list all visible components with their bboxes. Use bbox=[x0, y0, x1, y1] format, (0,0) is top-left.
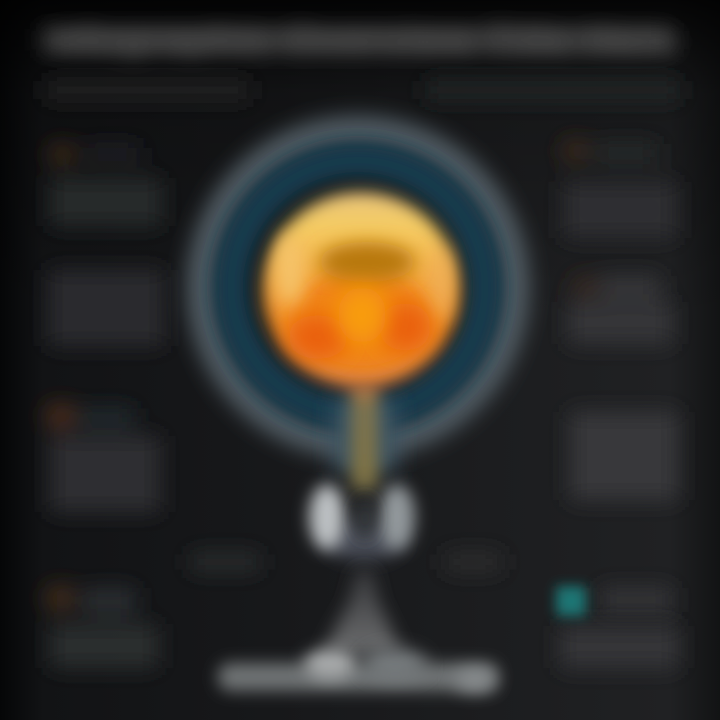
title text: Infographic Overview Title Here bbox=[42, 22, 678, 58]
inner teal ring bbox=[231, 160, 485, 414]
label: lower left of stem bbox=[190, 553, 260, 571]
panel: right column, block 4 bbox=[556, 586, 678, 668]
panel: right column, block 2 bbox=[568, 276, 672, 344]
panel: left column, block 3 bbox=[45, 403, 160, 512]
outer ring bbox=[203, 132, 513, 442]
base bbox=[218, 663, 498, 691]
flask bulb bbox=[309, 484, 415, 560]
orange sphere bbox=[263, 192, 459, 388]
title bbox=[42, 22, 678, 58]
title glow band bbox=[50, 30, 670, 50]
stem bbox=[334, 385, 396, 493]
panel: left column, block 1 bbox=[48, 143, 162, 226]
panel: left column, block 2 bbox=[48, 270, 164, 346]
label: lower right of stem bbox=[445, 553, 501, 571]
subtitle right bbox=[425, 80, 680, 100]
orange lobe left bbox=[288, 315, 348, 359]
bulb base bbox=[324, 520, 404, 560]
panel: right column, block 1 bbox=[561, 140, 676, 238]
neck bbox=[322, 570, 402, 655]
panel: right column, block 3 bbox=[570, 412, 678, 500]
base right highlight bbox=[455, 669, 495, 691]
icon: teal square bbox=[556, 586, 586, 616]
concentric rings bbox=[203, 132, 513, 442]
center gap bbox=[355, 496, 375, 540]
subtitle left bbox=[45, 80, 250, 100]
left lobe bbox=[309, 484, 345, 550]
base left highlight bbox=[304, 649, 356, 679]
sphere left glow bbox=[278, 234, 302, 306]
orange lobe right bbox=[379, 303, 431, 351]
flask stand bbox=[218, 570, 498, 691]
sphere right glow bbox=[434, 249, 450, 321]
panel: left column, block 4 bbox=[45, 585, 158, 668]
bright core bbox=[338, 287, 386, 343]
side text blocks bbox=[45, 140, 678, 668]
base center tone bbox=[363, 649, 427, 679]
sphere orange body bbox=[294, 268, 430, 372]
dark amber band bbox=[319, 242, 415, 282]
right lobe bbox=[379, 484, 415, 550]
